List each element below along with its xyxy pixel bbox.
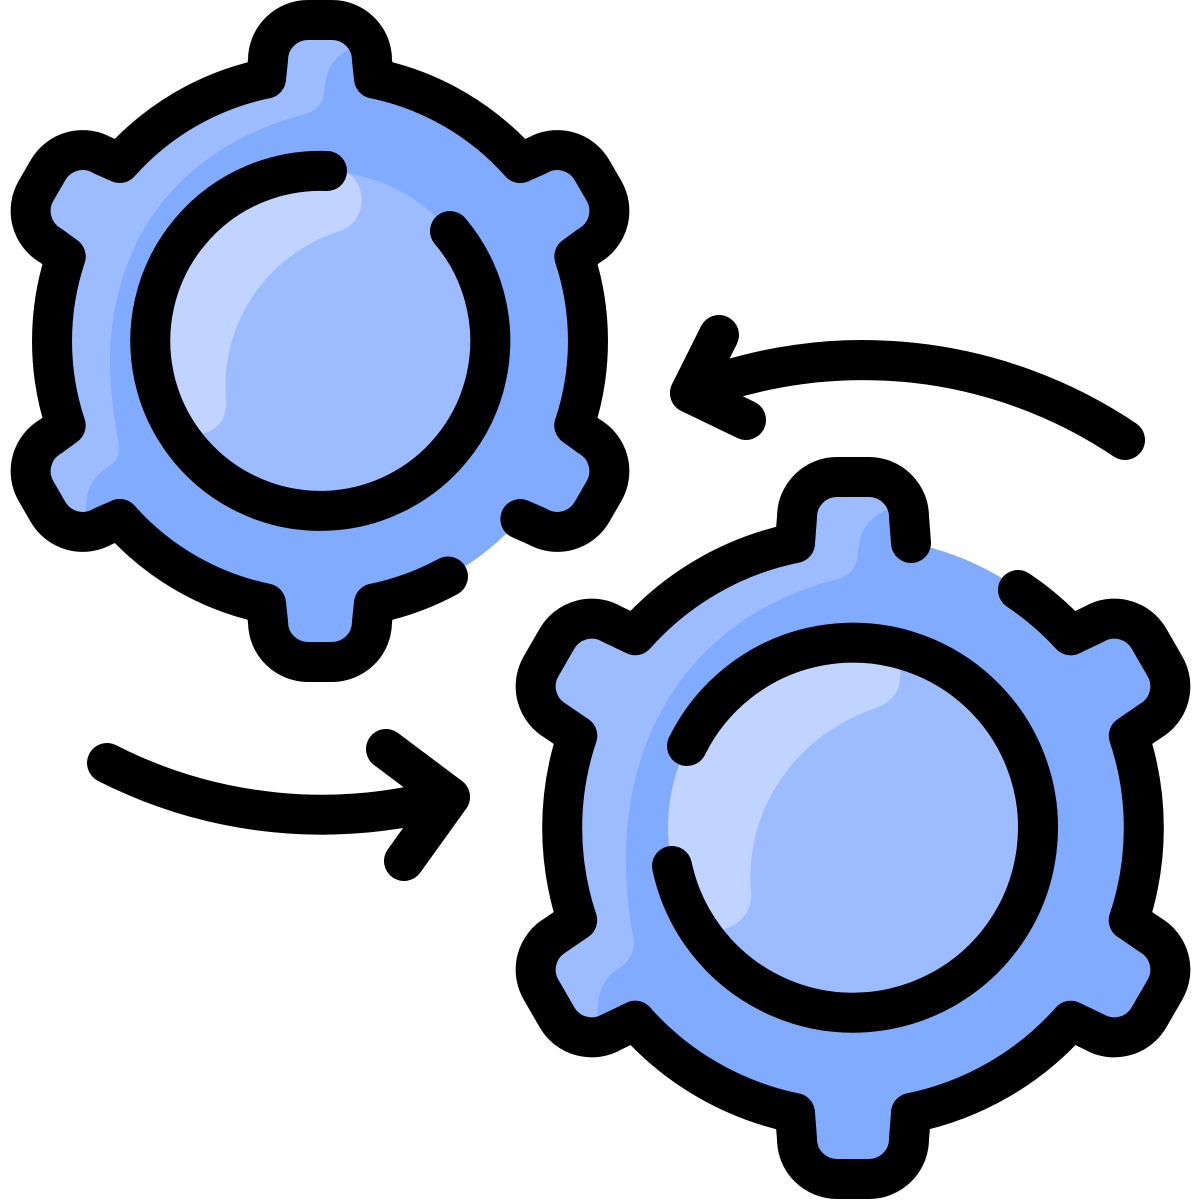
gear body fill — [86, 49, 590, 642]
gear hub fill — [150, 171, 490, 511]
gear body fill — [598, 509, 1150, 1159]
hub highlight — [170, 173, 362, 434]
gear light crescent shading — [556, 497, 888, 1018]
icon: bottom-right gear — [516, 457, 1190, 1199]
gear outline — [440, 464, 1200, 1192]
hub highlight — [668, 662, 900, 930]
gear hub fill — [668, 643, 1038, 1013]
arrow: top right pointing left — [690, 335, 1125, 440]
gear outline — [0, 7, 698, 662]
icon: top-left gear — [10, 0, 630, 682]
hub ring outline — [672, 643, 1038, 1013]
gear light crescent shading — [50, 40, 349, 512]
hub ring outline — [150, 171, 490, 511]
arrow: bottom left pointing right — [107, 749, 450, 861]
